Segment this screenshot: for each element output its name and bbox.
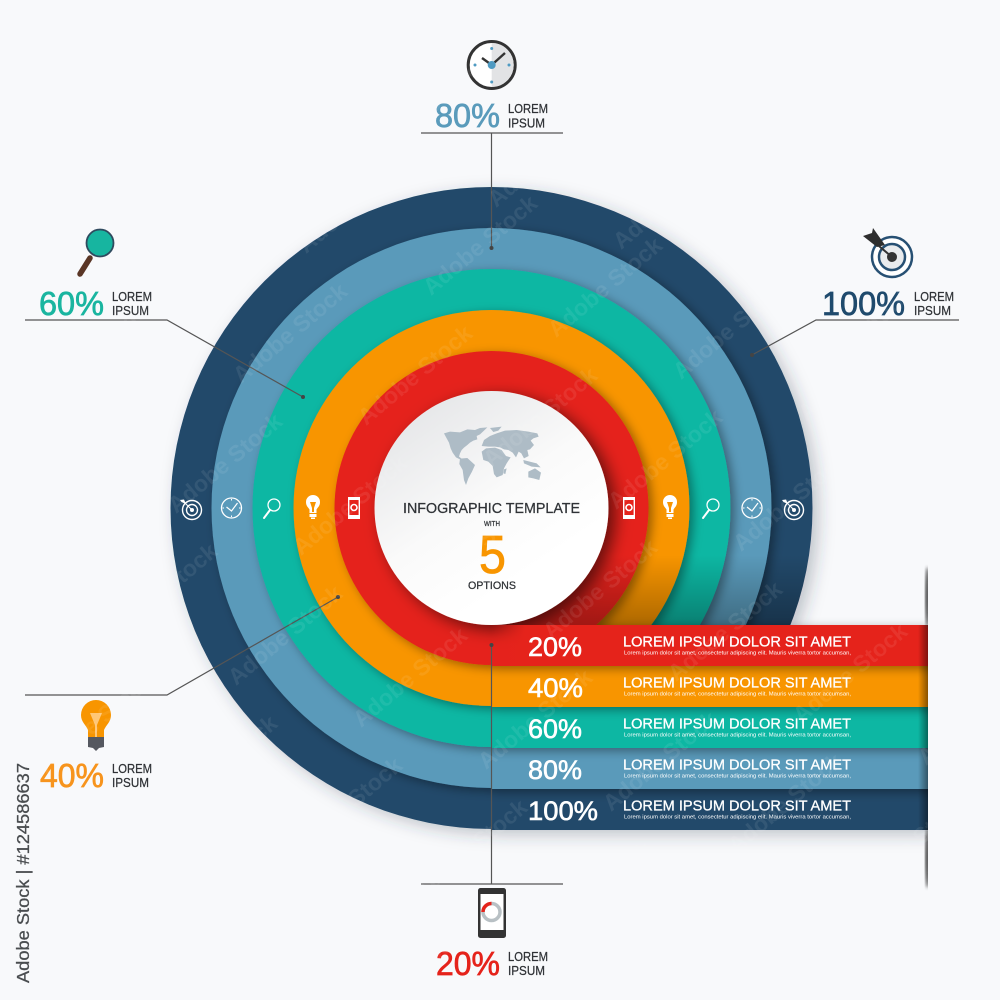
callout: 20% bottom bbox=[421, 643, 563, 982]
label bbox=[508, 949, 548, 978]
icon: target bbox=[782, 500, 804, 520]
ring and band: orange 40% bbox=[294, 310, 936, 707]
band text: 60%: Lorem ipsum dolor sit amet, consectetur adipiscing elit. Mauris viverra tortor accumsan, bbox=[624, 732, 851, 738]
watermark: Adobe Stock bbox=[168, 106, 292, 216]
watermark: Adobe Stock bbox=[533, 836, 657, 946]
band text: 100% bbox=[528, 796, 851, 826]
stock id vertical text: Adobe Stock | #124586637 bbox=[13, 763, 33, 983]
label: LOREM bbox=[112, 761, 152, 776]
label: LOREM bbox=[508, 101, 548, 116]
value: 60% bbox=[39, 285, 104, 322]
ring and band: red 20% bbox=[334, 351, 936, 666]
watermark: Adobe Stock bbox=[598, 706, 722, 816]
watermark: Adobe Stock bbox=[293, 148, 417, 258]
value: 20% bbox=[436, 945, 500, 982]
label bbox=[112, 761, 152, 790]
with label: WITH bbox=[484, 521, 500, 528]
watermark: Adobe Stock bbox=[793, 316, 917, 426]
icon: clock bbox=[742, 498, 762, 518]
leader line bbox=[752, 320, 959, 355]
right ring icons bbox=[623, 495, 804, 520]
watermark: Adobe Stock bbox=[408, 794, 532, 904]
icon: phone bbox=[348, 497, 360, 519]
band text: 40%: LOREM IPSUM DOLOR SIT AMET bbox=[623, 674, 851, 692]
watermark: Adobe Stock bbox=[668, 274, 792, 384]
label bbox=[914, 289, 954, 318]
center text and map bbox=[403, 427, 580, 592]
band text: 80%: Lorem ipsum dolor sit amet, consectetur adipiscing elit. Mauris viverra tortor accumsan, bbox=[624, 774, 851, 780]
label: LOREM bbox=[914, 289, 954, 304]
watermark: Adobe Stock bbox=[853, 488, 977, 598]
value: 80% bbox=[435, 97, 500, 134]
watermark: Adobe Stock bbox=[733, 186, 857, 296]
band text: 100%: LOREM IPSUM DOLOR SIT AMET bbox=[623, 798, 851, 814]
icon: target bbox=[863, 228, 912, 277]
band text: 40% bbox=[528, 673, 851, 703]
icon: bulb bbox=[663, 495, 677, 519]
watermark: Adobe Stock bbox=[548, 14, 672, 124]
watermark: Adobe Stock bbox=[283, 752, 407, 862]
band text: 60%: LOREM IPSUM DOLOR SIT AMET bbox=[623, 716, 851, 732]
icon: magnifier bbox=[703, 499, 719, 518]
leader line bbox=[25, 320, 303, 397]
watermark: Adobe Stock bbox=[858, 228, 982, 338]
watermark: Adobe Stock bbox=[348, 622, 472, 732]
watermark: Adobe Stock bbox=[483, 102, 607, 212]
world map bbox=[444, 427, 541, 485]
band text: 20%: LOREM IPSUM DOLOR SIT AMET bbox=[623, 634, 851, 650]
icon: target bbox=[180, 500, 202, 520]
label: IPSUM bbox=[914, 303, 951, 318]
watermark: Adobe Stock bbox=[608, 144, 732, 254]
band text: 60%: 60% bbox=[528, 714, 582, 744]
icon: phone bbox=[623, 497, 635, 519]
leader line bbox=[421, 133, 563, 248]
watermark: Adobe Stock bbox=[413, 492, 537, 602]
label: IPSUM bbox=[508, 116, 545, 130]
watermark: Adobe Stock bbox=[103, 236, 227, 346]
title: INFOGRAPHIC TEMPLATE bbox=[403, 501, 580, 517]
label: IPSUM bbox=[508, 963, 545, 978]
ring and band: blue 80% bbox=[212, 228, 936, 789]
watermark: Adobe Stock bbox=[223, 580, 347, 690]
icon: bulb bbox=[81, 700, 111, 751]
label: LOREM bbox=[508, 949, 548, 964]
value: 40% bbox=[40, 757, 104, 794]
number five: 5 bbox=[479, 525, 506, 585]
watermark: Adobe Stock bbox=[288, 450, 412, 560]
ring and band: teal 60% bbox=[252, 269, 936, 748]
band text: 60% bbox=[528, 714, 851, 744]
watermark: Adobe Stock bbox=[233, 18, 357, 128]
watermark: Adobe Stock bbox=[788, 618, 912, 728]
watermark: Adobe Stock bbox=[798, 98, 922, 208]
ring and band: navy 100% bbox=[170, 187, 936, 830]
band text: 80%: 80% bbox=[528, 755, 582, 785]
watermark: Adobe Stock bbox=[228, 278, 352, 388]
label bbox=[508, 101, 548, 130]
label: IPSUM bbox=[112, 303, 149, 318]
icon: magnifier bbox=[264, 499, 280, 518]
label: LOREM bbox=[112, 289, 152, 304]
value: 100% bbox=[822, 285, 905, 322]
center white disc bbox=[374, 391, 608, 625]
watermark: Adobe Stock bbox=[603, 404, 727, 514]
concentric rings and ribbon bands bbox=[170, 187, 936, 888]
ring shading near the ribbons bbox=[496, 563, 806, 625]
leader line bbox=[25, 597, 338, 695]
watermark: Adobe Stock bbox=[478, 362, 602, 472]
icon: magnifier bbox=[80, 230, 114, 274]
watermark: Adobe Stock bbox=[658, 878, 782, 988]
watermark: Adobe Stock bbox=[538, 534, 662, 644]
label bbox=[112, 289, 152, 318]
watermark: Adobe Stock bbox=[158, 710, 282, 820]
watermark: Adobe Stock bbox=[723, 748, 847, 858]
watermark: Adobe Stock bbox=[98, 538, 222, 648]
icon: clock bbox=[222, 498, 242, 518]
band text: 40%: 40% bbox=[528, 673, 583, 703]
left ring icons bbox=[180, 495, 360, 520]
watermark: Adobe Stock bbox=[673, 56, 797, 166]
label: IPSUM bbox=[112, 775, 149, 790]
options label: OPTIONS bbox=[468, 580, 516, 592]
callout: 100% right bbox=[750, 228, 959, 357]
band text: 20%: 20% bbox=[528, 632, 582, 662]
icon: bulb bbox=[306, 495, 320, 519]
right edge shadow bbox=[919, 566, 928, 890]
watermark: Adobe Stock bbox=[728, 446, 852, 556]
leader line bbox=[421, 645, 563, 884]
callout: 60% left bbox=[25, 230, 305, 399]
callout: 40% left bbox=[25, 595, 340, 794]
watermark: Adobe Stock bbox=[218, 882, 342, 992]
watermark: Adobe Stock bbox=[43, 64, 167, 174]
watermark: Adobe Stock bbox=[848, 790, 972, 900]
red band surface bbox=[494, 625, 560, 640]
watermark: Adobe Stock bbox=[663, 576, 787, 686]
band text: 40%: Lorem ipsum dolor sit amet, consectetur adipiscing elit. Mauris viverra tortor accumsan, bbox=[624, 692, 851, 698]
band text: 20% bbox=[528, 632, 851, 662]
watermark: Adobe Stock bbox=[33, 668, 157, 778]
watermark: Adobe Stock bbox=[163, 408, 287, 518]
watermark: Adobe Stock bbox=[38, 366, 162, 476]
icon: phone bbox=[478, 888, 506, 938]
icon: clock bbox=[468, 42, 515, 88]
band text: 100%: 100% bbox=[528, 796, 598, 826]
watermark: Adobe Stock bbox=[353, 320, 477, 430]
band text: 80% bbox=[528, 755, 851, 785]
watermark: Adobe Stock bbox=[473, 664, 597, 774]
watermark: Adobe Stock bbox=[543, 232, 667, 342]
watermark: Adobe Stock bbox=[93, 840, 217, 950]
callout: 80% top bbox=[421, 42, 563, 250]
watermark: Adobe Stock bbox=[418, 190, 542, 300]
band text: 100%: Lorem ipsum dolor sit amet, consectetur adipiscing elit. Mauris viverra tortor accumsan, bbox=[624, 814, 851, 820]
watermark: Adobe Stock bbox=[358, 60, 482, 170]
band text: 20%: Lorem ipsum dolor sit amet, consectetur adipiscing elit. Mauris viverra tortor accumsan, bbox=[624, 650, 851, 656]
band text: 80%: LOREM IPSUM DOLOR SIT AMET bbox=[623, 756, 851, 774]
